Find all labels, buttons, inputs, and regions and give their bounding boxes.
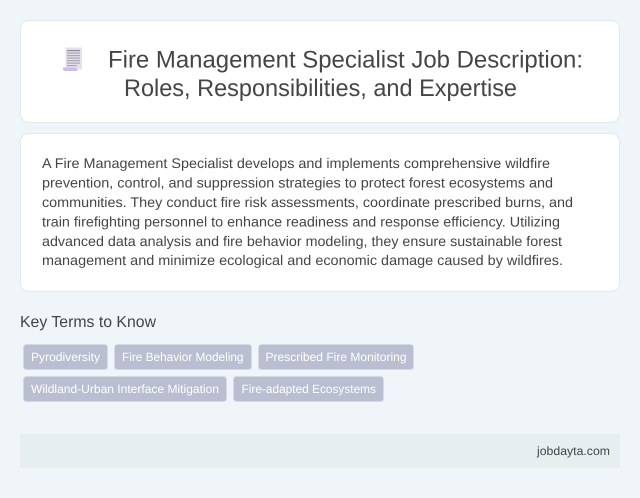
heading: key terms: Key Terms to Know [20,314,156,331]
tag: Wildland-Urban Interface Mitigation [24,376,226,402]
tag: Pyrodiversity: Pyrodiversity [31,350,100,364]
footer source text: jobdayta.com [536,444,610,458]
tag: Fire-adapted Ecosystems [234,376,384,402]
tag: Prescribed Fire Monitoring: Prescribed Fire Monitoring [266,350,406,364]
tags: key terms [24,344,414,402]
tag: Fire Behavior Modeling: Fire Behavior Modeling [122,350,244,364]
text block: job description: advanced data analysis and fire behavior modeling, they ensure sustainable forest [42,233,562,249]
panel: description card [20,134,620,292]
footer bar [20,434,620,468]
text block: job description: communities. They conduct fire risk assessments, coordinate prescribed burns, and [42,194,573,210]
text block: job description [42,155,573,268]
text block: job description: prevention, control, and suppression strategies to protect forest ecosystems and [42,174,553,190]
icon: document scroll [63,48,82,71]
tag: Wildland-Urban Interface Mitigation: Wildland-Urban Interface Mitigation [31,382,219,396]
panel: title card [20,20,620,122]
tag: Prescribed Fire Monitoring [258,344,414,370]
title: Roles, Responsibilities, and Expertise [124,75,517,102]
title [108,46,583,102]
title: Fire Management Specialist Job Description: [108,46,583,74]
tag: Fire Behavior Modeling [114,344,252,370]
tag: Pyrodiversity [24,344,108,370]
text block: job description: train firefighting personnel to enhance readiness and response efficiency. Utilizing [42,214,560,230]
text block: job description: management and minimize ecological and economic damage caused by wildfires. [42,252,563,268]
tag: Fire-adapted Ecosystems: Fire-adapted Ecosystems [242,382,376,396]
text block: job description: A Fire Management Specialist develops and implements comprehensive wildfire [42,155,550,171]
